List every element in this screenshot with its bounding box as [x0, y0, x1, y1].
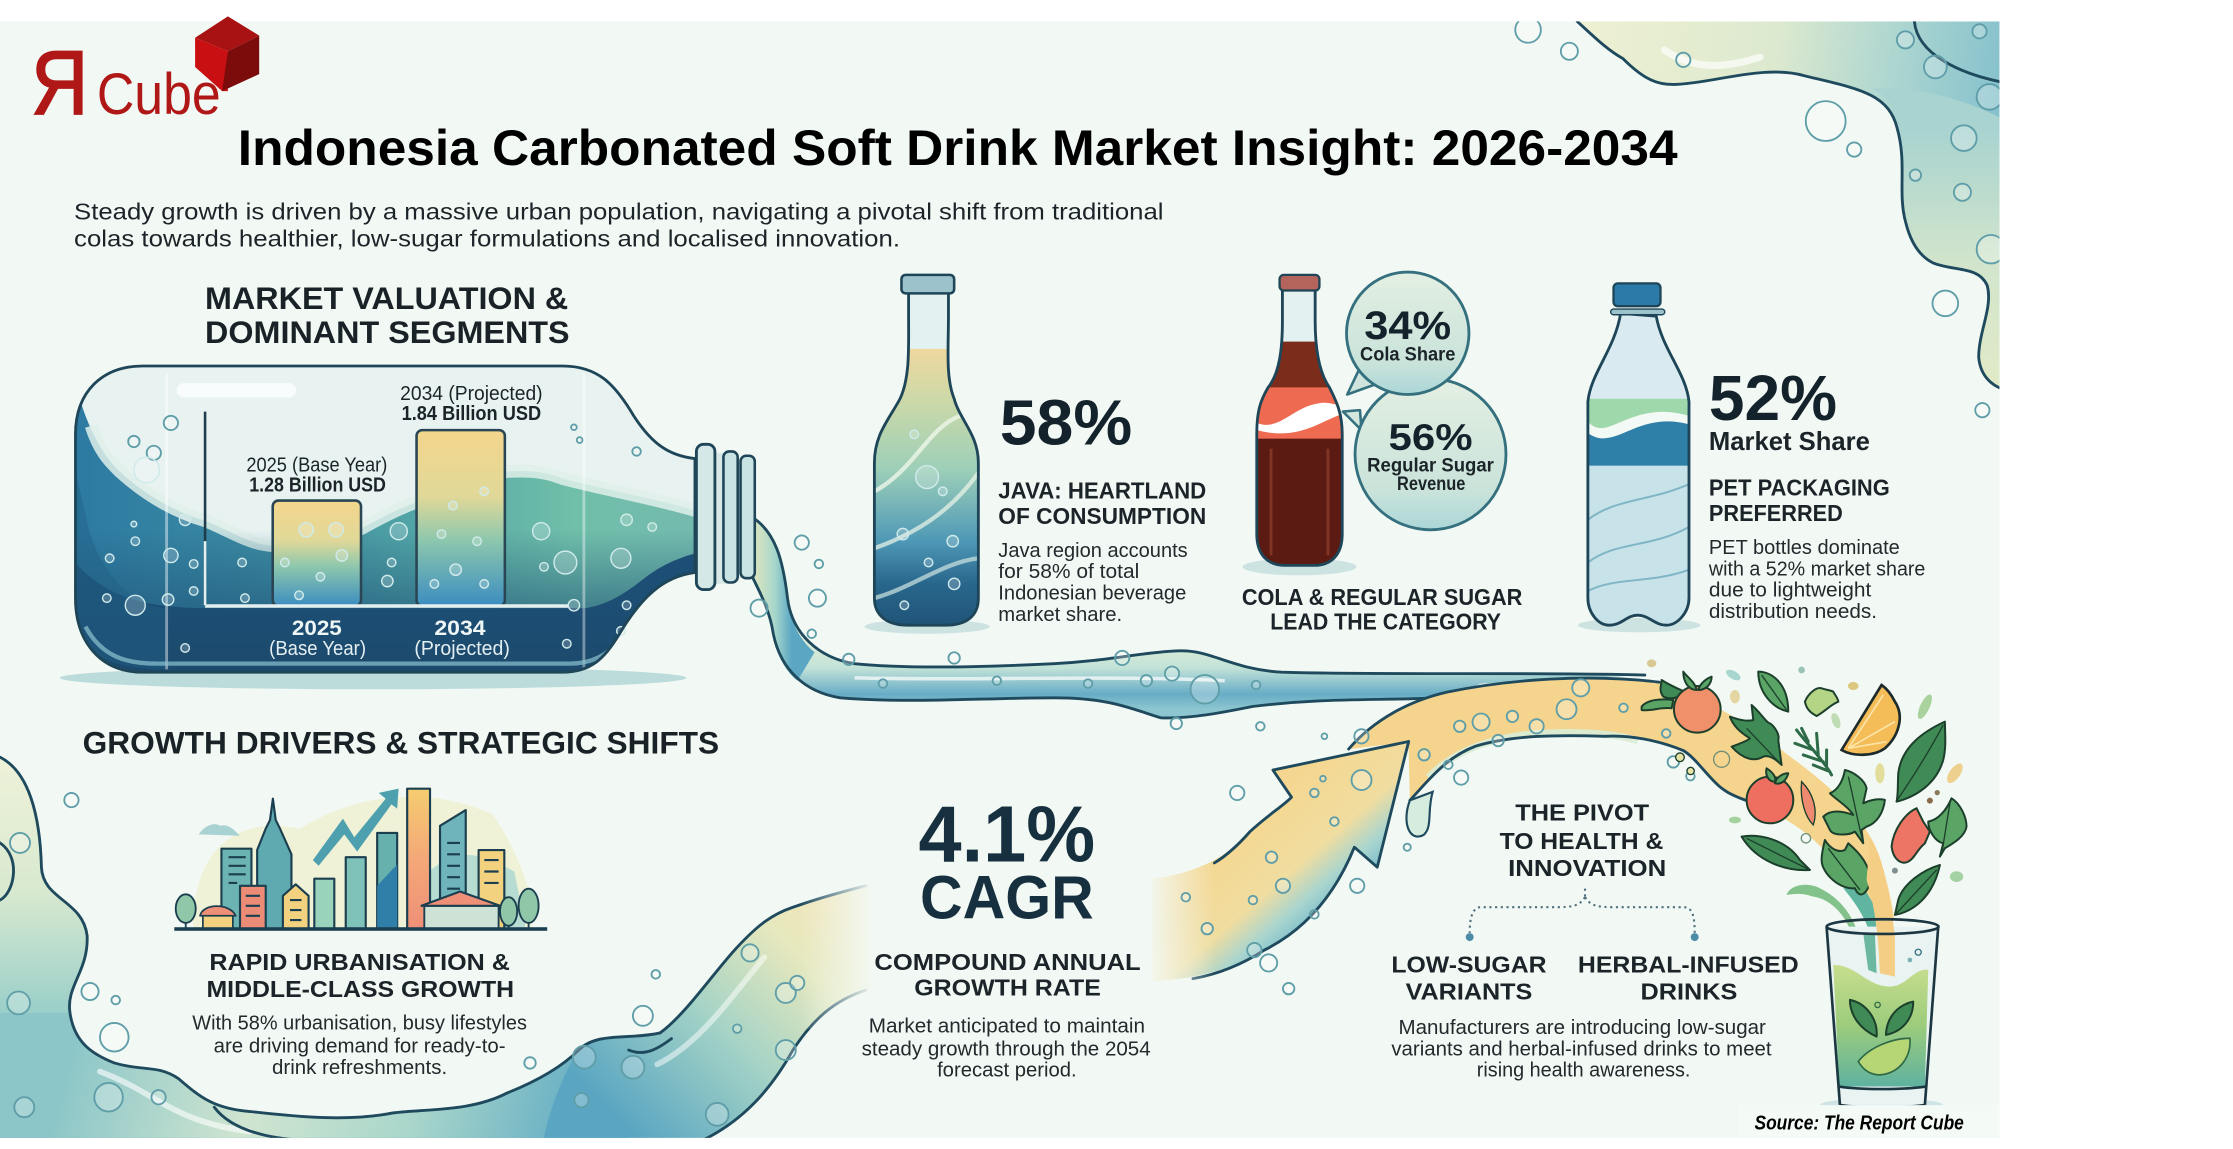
icon: growth arrow [313, 789, 399, 866]
stat: CAGR [862, 790, 1151, 1082]
text: rapid urbanisation: MIDDLE-CLASS GROWTH [206, 976, 514, 1002]
building: small house [200, 906, 236, 929]
building: right glass tower [440, 810, 466, 929]
icon: rosemary [1795, 728, 1832, 775]
label: 2025 value: 1.28 Billion USD [249, 474, 386, 496]
text: pet body: due to lightweight [1709, 580, 1872, 602]
bubble: 56% regular sugar revenue: Revenue [1397, 474, 1466, 495]
swoosh: yellow flow to glass [1322, 678, 1894, 933]
icon: parsley [1823, 770, 1885, 843]
heading: pet: PET PACKAGING [1709, 475, 1890, 501]
leaves and lime in drink [1850, 949, 1921, 1075]
heading: market valuation: DOMINANT SEGMENTS [205, 315, 570, 350]
label: market share: Market Share [1709, 428, 1870, 456]
building: main skyscraper [257, 799, 291, 929]
text: pet body: with a 52% market share [1708, 558, 1925, 580]
cola bottle illustration [1243, 275, 1356, 575]
icon: glass of herbal drink [1820, 837, 1943, 1112]
icon: red chunk [1892, 808, 1930, 863]
text: rapid urbanisation [192, 949, 527, 1079]
text: pet body: PET bottles dominate [1709, 537, 1900, 559]
stream into glass [1863, 837, 1895, 977]
source label: Source: The Report Cube [1754, 1112, 1964, 1134]
decorative drops [1647, 659, 1966, 882]
icon: green splash [1787, 885, 1858, 933]
text: rapid urbanisation: are driving demand for ready-to- [214, 1035, 506, 1057]
axis labels: 2034 [434, 616, 486, 640]
heading: cola: LEAD THE CATEGORY [1270, 608, 1501, 634]
logo: RCube [31, 16, 259, 134]
icon: red cube [195, 16, 259, 91]
label: 2025 value: 2025 (Base Year) [246, 454, 387, 476]
text: java body: Java region accounts [998, 540, 1188, 562]
icon: red apple [1747, 768, 1793, 823]
axis labels [269, 616, 510, 660]
stat: CAGR: COMPOUND ANNUAL [874, 949, 1141, 975]
logo: RCube: R [31, 32, 88, 134]
text: java body [998, 540, 1188, 626]
bar: growth bar 3 [377, 833, 397, 929]
label: 2034 value [400, 383, 543, 425]
heading: growth drivers: GROWTH DRIVERS & STRATEGIC SHIFTS [83, 725, 719, 760]
text: pivot heading: THE PIVOT [1515, 799, 1649, 825]
market valuation bottle with bar chart [57, 356, 755, 689]
bubble: 56% regular sugar revenue: Regular Sugar [1367, 455, 1494, 476]
subtitle: Steady growth is driven by a massive urban population, navigating a pivotal shift from traditional [74, 198, 1163, 224]
bubble: 56% regular sugar revenue [1343, 379, 1506, 530]
stat: CAGR: steady growth through the 2054 [862, 1038, 1151, 1060]
bubble: 56% regular sugar revenue: 56% [1389, 416, 1473, 458]
stat: 58%: 58% [1000, 386, 1132, 458]
building: pavilion [421, 892, 500, 929]
text: pivot body: variants and herbal-infused drinks to meet [1391, 1038, 1772, 1060]
bar: growth bar 2 [346, 857, 366, 929]
bar: 2034 [417, 430, 505, 606]
stat: CAGR: 4.1% [919, 790, 1095, 879]
text: herbal-infused drinks: HERBAL-INFUSED [1578, 952, 1799, 978]
bubble: 34% cola share [1346, 272, 1469, 394]
text: pivot body: rising health awareness. [1477, 1060, 1690, 1082]
stat: CAGR: GROWTH RATE [914, 974, 1101, 1000]
building: red [240, 886, 266, 929]
bar: growth bar 1 [314, 879, 334, 929]
ground line [174, 927, 547, 931]
glass bottle illustration [864, 275, 993, 634]
subtitle [74, 198, 1163, 251]
bottle outline [75, 366, 695, 672]
icon: fruit and herbs [1642, 659, 1967, 933]
title: Indonesia Carbonated Soft Drink Market Insight: 2026-2034 [238, 120, 1678, 176]
stat: CAGR: Market anticipated to maintain [869, 1015, 1145, 1037]
label: 2034 value: 2034 (Projected) [400, 383, 543, 405]
icon: fern [1895, 865, 1940, 915]
text: low-sugar variants [1391, 952, 1547, 1005]
text: pet body [1708, 537, 1925, 623]
building: left tower [221, 849, 251, 929]
axis labels: (Projected) [414, 638, 510, 660]
stat: CAGR: CAGR [920, 864, 1094, 932]
building: yellow [283, 884, 309, 929]
heading: cola [1242, 584, 1522, 634]
stat: 52%: 52% [1709, 362, 1837, 434]
text: rapid urbanisation: With 58% urbanisation, busy lifestyles [192, 1013, 527, 1035]
source label [1737, 1105, 1999, 1138]
text: java body: for 58% of total [998, 561, 1139, 583]
glass body [1827, 927, 1938, 1105]
heading: java: JAVA: HEARTLAND [998, 477, 1206, 503]
panel: cola [1242, 272, 1522, 634]
heading: market valuation: MARKET VALUATION & [205, 281, 568, 316]
logo: RCube: Cube [97, 62, 221, 127]
text: pivot heading [1500, 799, 1666, 881]
heading: java: OF CONSUMPTION [998, 503, 1206, 529]
dotted bracket [1466, 889, 1699, 941]
icon: large mint leaf [1822, 840, 1877, 933]
text: herbal-infused drinks: DRINKS [1641, 979, 1737, 1005]
bottle body [76, 368, 694, 671]
text: low-sugar variants: VARIANTS [1406, 979, 1532, 1005]
glass outline [1827, 927, 1938, 1107]
label: 2025 value [246, 454, 387, 496]
bar: 2025 [273, 501, 361, 606]
heading: pet [1709, 475, 1890, 526]
bottle bubbles [103, 416, 657, 652]
decorative bottom left liquid wave [0, 757, 883, 1142]
drink liquid [1833, 965, 1928, 1087]
bar chart [205, 412, 568, 606]
text: pivot heading: TO HEALTH & [1500, 828, 1663, 854]
trees [176, 889, 539, 929]
text: pet body: distribution needs. [1709, 601, 1877, 623]
text: pivot heading: INNOVATION [1508, 855, 1666, 881]
label: 2034 value: 1.84 Billion USD [402, 403, 541, 425]
text: java body: Indonesian beverage [998, 583, 1186, 605]
text: low-sugar variants: LOW-SUGAR [1391, 952, 1547, 978]
bar: growth bar tall [407, 789, 430, 929]
icon: frilly leaf [1805, 688, 1838, 716]
heading: market valuation [205, 281, 570, 350]
bottle shadow [60, 666, 686, 689]
heading: java [998, 477, 1206, 529]
icon: small leaf [1758, 672, 1788, 712]
heading: cola: COLA & REGULAR SUGAR [1242, 584, 1522, 610]
panel: pet packaging [1578, 283, 1925, 637]
icon: herb sprig [1730, 705, 1782, 765]
icon: orange peel [1801, 782, 1815, 825]
panel: java bottle [864, 275, 1206, 634]
icon: orange fruit [1642, 672, 1721, 733]
bottle neck rings [696, 444, 755, 590]
icon: city skyline with growth [174, 789, 547, 931]
building: right yellow [479, 850, 504, 929]
text: herbal-infused drinks [1578, 952, 1799, 1005]
text: rapid urbanisation: RAPID URBANISATION & [209, 949, 510, 975]
arrow: growth [1143, 741, 1411, 994]
bubble: 34% cola share: Cola Share [1360, 344, 1456, 365]
subtitle: colas towards healthier, low-sugar formulations and localised innovation. [74, 225, 900, 251]
PET bottle illustration [1578, 283, 1700, 637]
heading: pet: PREFERRED [1709, 500, 1843, 526]
icon: lower left leaf [1742, 836, 1810, 870]
icon: big leaf [1897, 722, 1945, 802]
icon: citrus wedge [1842, 685, 1900, 755]
text: java body: market share. [998, 604, 1122, 626]
icon: right leaf [1928, 798, 1967, 857]
decorative top right liquid splash [1515, 17, 2006, 417]
axis labels: 2025 [292, 616, 342, 640]
text: pivot body [1391, 1017, 1772, 1082]
bubble: 34% cola share: 34% [1364, 304, 1451, 348]
stat: CAGR: forecast period. [937, 1060, 1077, 1082]
text: rapid urbanisation: drink refreshments. [272, 1057, 447, 1079]
text: pivot body: Manufacturers are introducing low-sugar [1398, 1017, 1766, 1039]
axis labels: (Base Year) [269, 638, 366, 660]
pouring stream from bottle to arrow [749, 516, 1645, 731]
